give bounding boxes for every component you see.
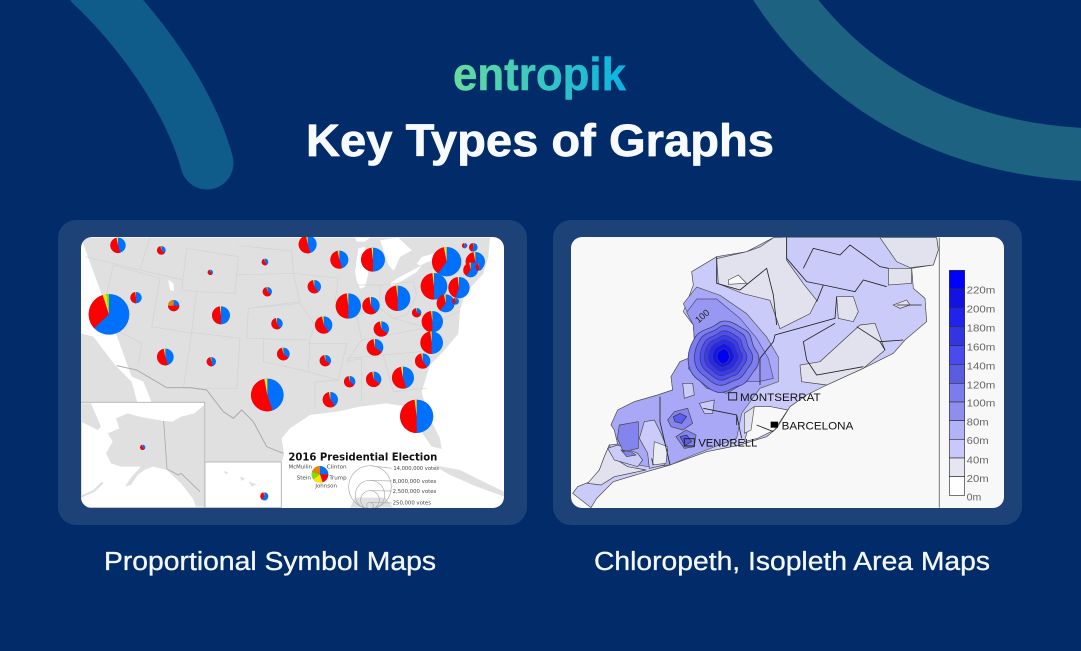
legend labels: 40m (967, 455, 989, 466)
legend vote labels: 14,000,000 votes (393, 466, 439, 472)
legend colour ramp (949, 270, 965, 495)
caption: proportional symbol maps: Proportional Symbol Maps (104, 548, 436, 576)
region: darker pockets (673, 413, 692, 446)
label: 100: 100 (693, 308, 712, 325)
legend labels: 0m (967, 493, 981, 504)
panel: choropleth and isopleth maps (553, 220, 1022, 525)
logo: entropik: entropik (453, 48, 626, 100)
label: Montserrat (728, 392, 820, 401)
contours: isopleth rings (688, 321, 759, 392)
legend candidate labels: Trump (328, 475, 347, 481)
region: grey pocket (653, 442, 668, 465)
legend labels: 180m (967, 323, 995, 334)
legend labels: 160m (967, 342, 995, 353)
label: Barcelona (770, 422, 854, 430)
region: medium rainfall (611, 287, 778, 467)
label: Vendrell (684, 438, 757, 446)
legend candidate labels: Johnson (314, 484, 337, 490)
label: Vendrell: VENDRELL (698, 438, 757, 450)
label: Montserrat: MONTSERRAT (740, 392, 821, 404)
legend labels: 20m (967, 474, 989, 485)
legend vote labels: 8,000,000 votes (393, 479, 436, 485)
legend labels: 100m (967, 398, 995, 409)
legend labels: 80m (967, 417, 989, 428)
title: Key Types of Graphs (306, 115, 774, 166)
legend labels: 140m (967, 361, 995, 372)
legend candidate labels: Stein (297, 475, 311, 481)
panel: proportional symbol maps (58, 220, 527, 525)
legend candidate labels: Clinton (327, 465, 347, 471)
region: shaded band around peak (687, 299, 773, 393)
region: base land (573, 238, 938, 508)
legend labels: 120m (967, 380, 995, 391)
decorative arc: top left (92, 0, 207, 163)
legend divider line (938, 238, 940, 508)
decorative arc: top right (775, 0, 1081, 155)
elevation legend (949, 270, 995, 504)
regions: higher rainfall southwest (617, 408, 696, 457)
region: coastal grey strip (744, 407, 754, 433)
legend candidate labels (289, 465, 347, 490)
region: near-zero rainfall (728, 275, 788, 442)
caption: choropleth and isopleth maps: Chloropeth, Isopleth Area Maps (594, 548, 990, 576)
legend vote labels: 2,500,000 votes (393, 489, 436, 495)
region: lavender pockets (608, 383, 714, 468)
legend labels: 60m (967, 436, 989, 447)
regions: low rainfall (588, 237, 938, 485)
legend labels: 220m (967, 286, 995, 297)
inset: Alaska (81, 402, 205, 508)
map: 2016 presidential election (81, 235, 504, 510)
inset: Hawaii (205, 462, 281, 508)
map: rainfall isopleths (571, 237, 1004, 508)
legend vote labels: 250,000 votes (393, 501, 431, 507)
legend candidate labels: McMullin (289, 465, 312, 471)
pie symbols (89, 235, 485, 500)
legend size circles (349, 466, 392, 510)
label: Barcelona: BARCELONA (782, 421, 854, 433)
legend vote labels (393, 466, 439, 507)
legend pie key (312, 466, 328, 483)
map legend (288, 452, 439, 510)
region boundaries (652, 238, 922, 465)
legend title: 2016 Presidential Election (288, 452, 437, 464)
legend labels: 200m (967, 304, 995, 315)
legend labels (967, 286, 995, 504)
